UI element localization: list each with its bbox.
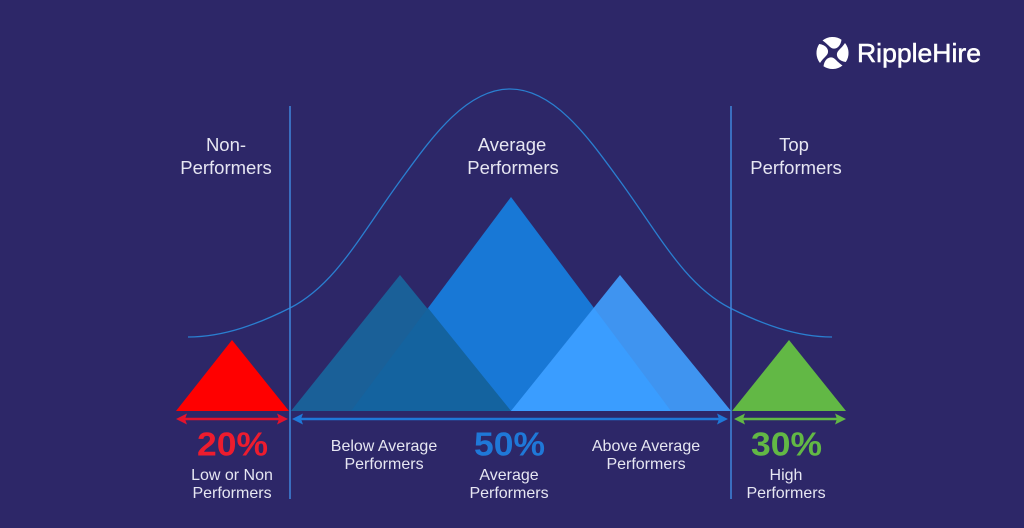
arrow: red span bbox=[176, 414, 288, 424]
logo wordmark: RippleHire bbox=[857, 38, 981, 68]
heading: Top Performers: Top bbox=[779, 134, 809, 155]
label: average performers: Average bbox=[479, 467, 539, 484]
label: above average performers: Above Average bbox=[592, 438, 700, 455]
arrow: green span bbox=[734, 414, 846, 424]
label: high performers: High bbox=[770, 467, 802, 484]
triangle: below average performers bbox=[291, 275, 511, 411]
triangle: above average overlap bbox=[511, 308, 671, 411]
triangle: low performers bbox=[176, 340, 289, 411]
left divider line bbox=[289, 106, 291, 499]
stat: 50%: 50% bbox=[474, 426, 545, 462]
stat: 20%: 20% bbox=[197, 426, 268, 462]
heading: Non-Performers: Performers bbox=[180, 157, 272, 178]
heading: Top Performers: Performers bbox=[750, 157, 842, 178]
label: low or non performers: Low or Non bbox=[191, 467, 273, 484]
label: average performers: Performers bbox=[469, 485, 549, 502]
triangle: below average overlap bbox=[351, 308, 511, 411]
triangle: average performers bbox=[351, 197, 671, 411]
label: low or non performers: Performers bbox=[192, 485, 272, 502]
bell curve bbox=[188, 89, 832, 337]
logo: RippleHire bbox=[816, 37, 981, 69]
right divider line bbox=[730, 106, 732, 499]
heading: Average Performers: Average bbox=[478, 134, 546, 155]
label: high performers: Performers bbox=[746, 485, 826, 502]
label: below average performers: Below Average bbox=[331, 438, 437, 455]
triangle: above average performers bbox=[511, 275, 731, 411]
arrow: blue span bbox=[292, 414, 728, 424]
heading: Non-Performers: Non- bbox=[206, 134, 246, 155]
heading: Average Performers: Performers bbox=[467, 157, 559, 178]
triangle: high performers bbox=[732, 340, 846, 411]
stat: 30%: 30% bbox=[751, 426, 822, 462]
label: above average performers: Performers bbox=[606, 456, 686, 473]
icon: logo ripple mark bbox=[816, 37, 849, 69]
label: below average performers: Performers bbox=[344, 456, 424, 473]
